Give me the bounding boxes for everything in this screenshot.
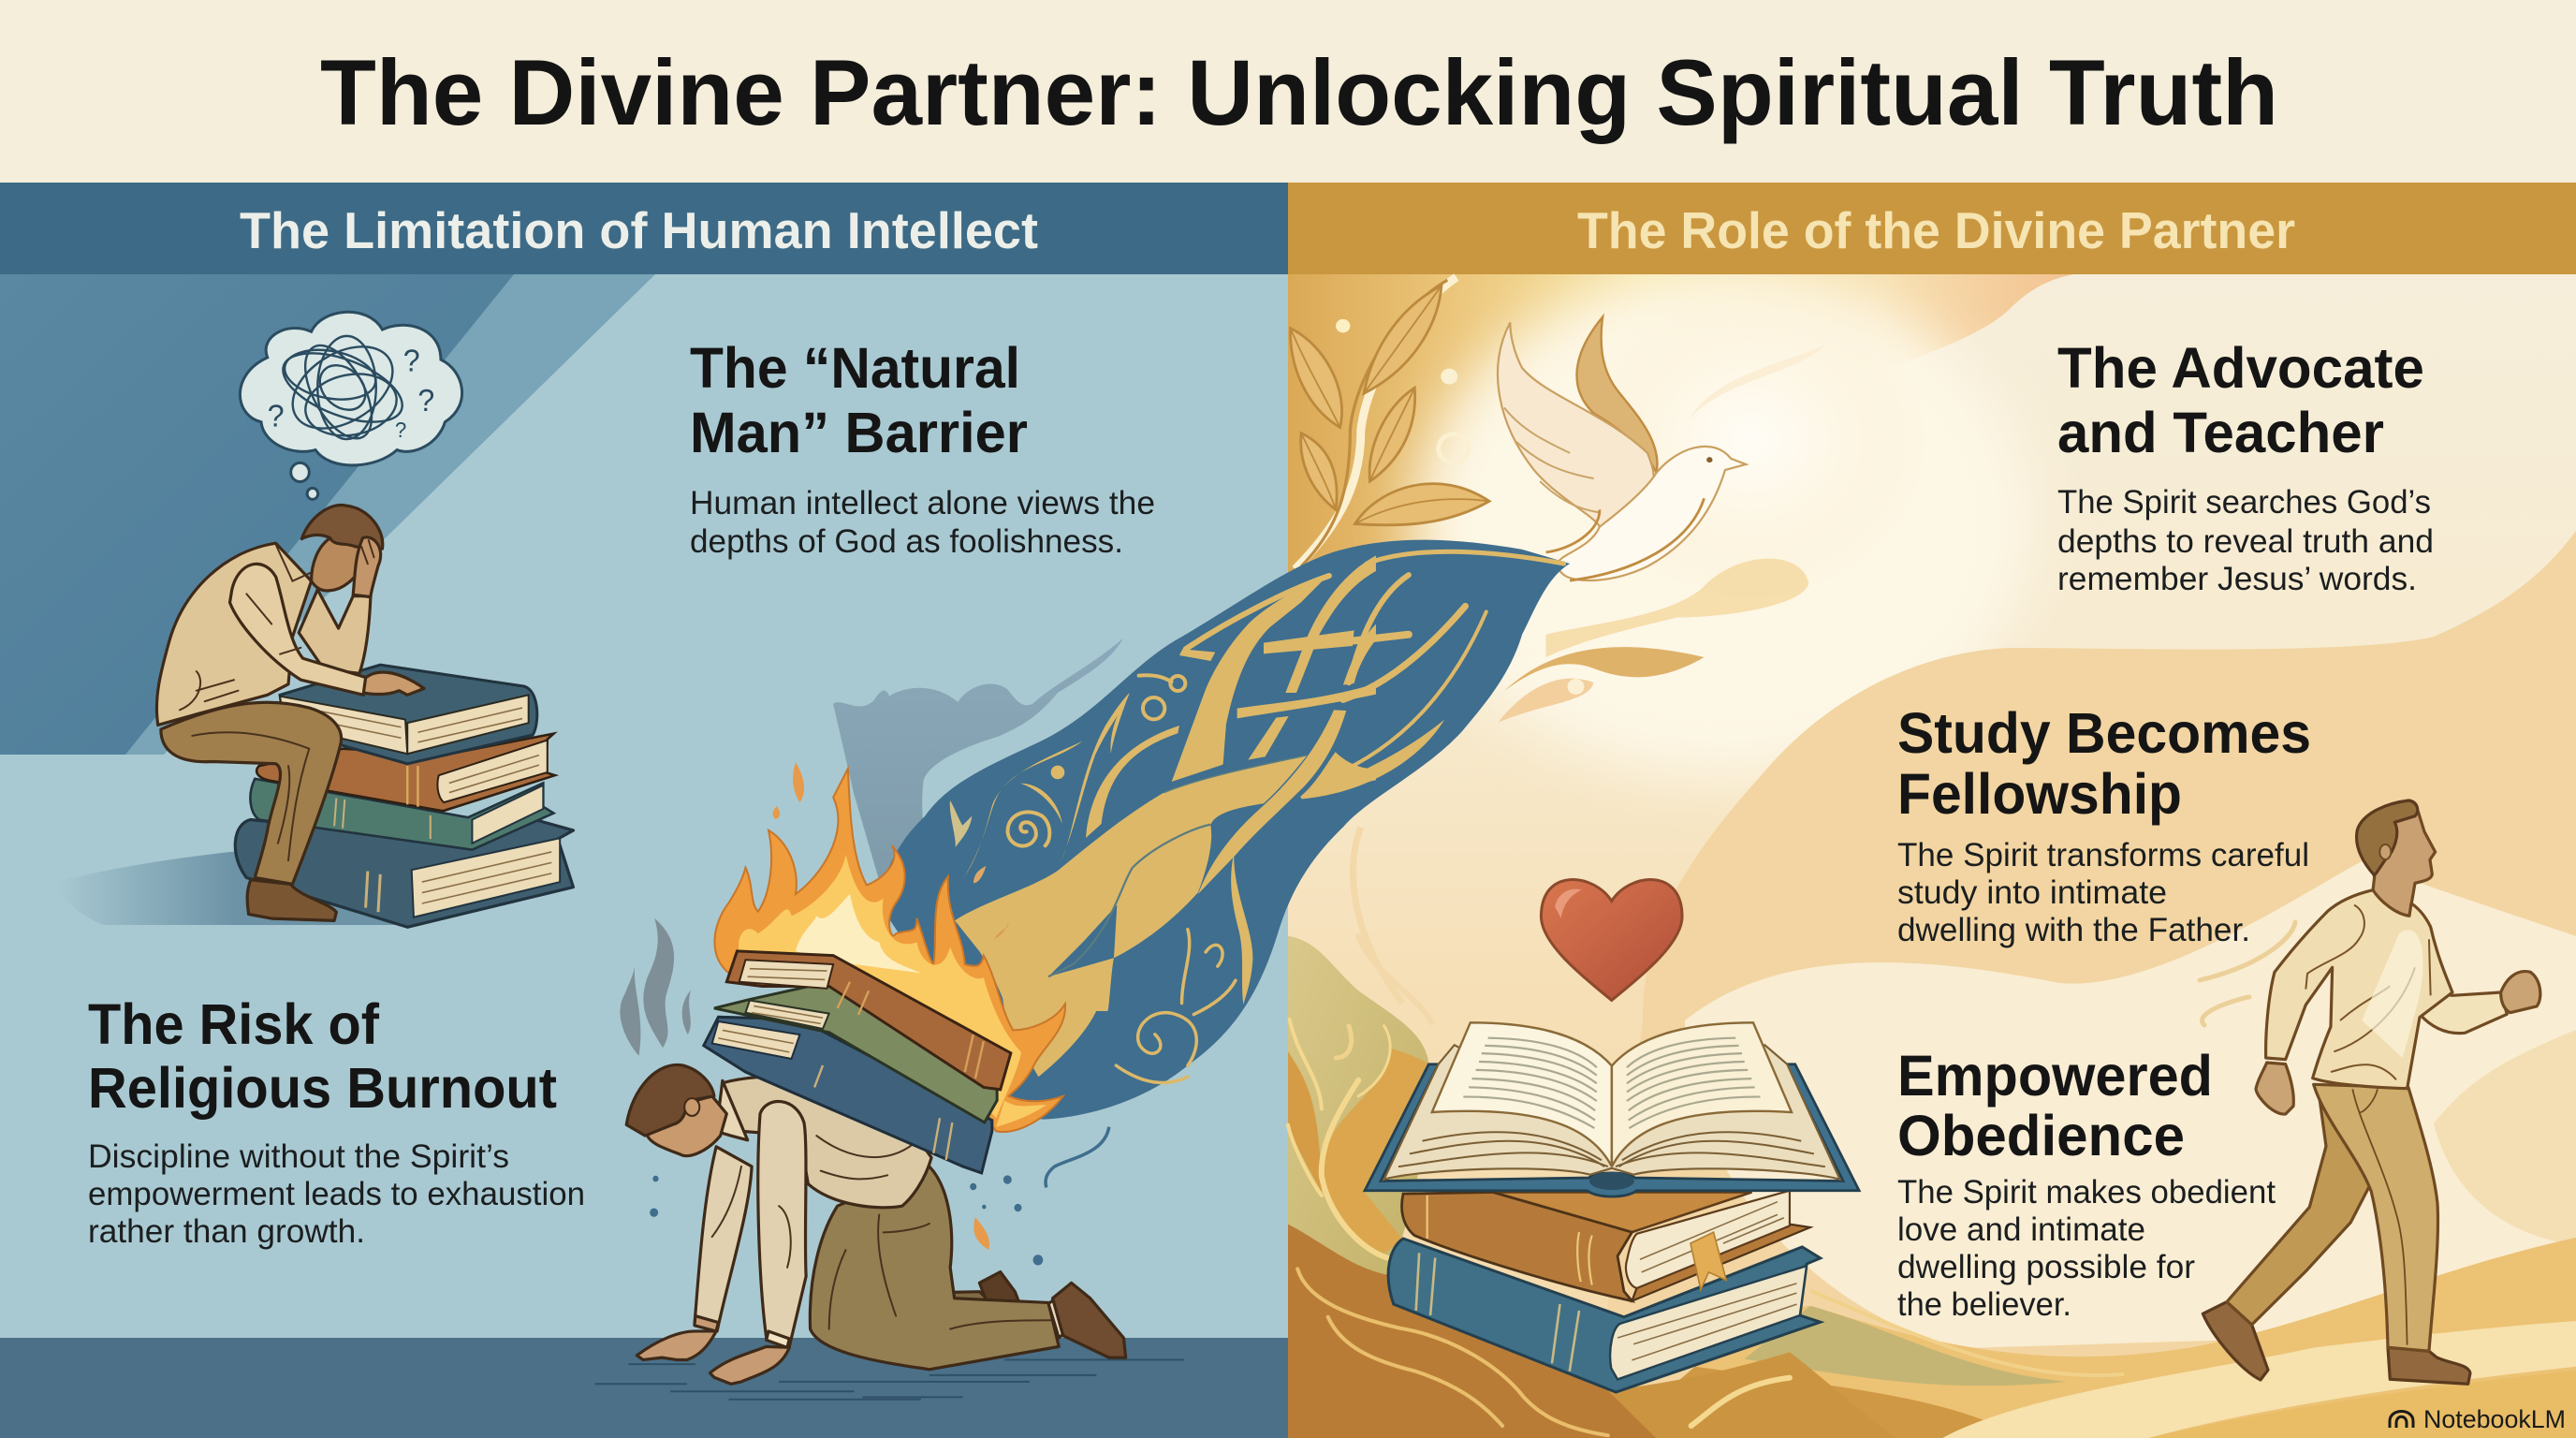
text block: empowered obedience: Empowered [1897, 1044, 2213, 1108]
dove [1498, 316, 1746, 580]
text block: advocate and teacher: The Spirit searches God’s [2057, 484, 2431, 521]
illustration: walking man [2203, 800, 2540, 1384]
text block: risk of religious burnout: Religious Burnout [88, 1056, 557, 1120]
text block: natural man barrier: depths of God as foolishness. [690, 523, 1123, 560]
text block: empowered obedience: Obedience [1897, 1104, 2185, 1167]
illustration: vine, leaves and dove [1291, 277, 1825, 1003]
smoke cloud behind flames [833, 638, 1123, 915]
blue lower book [1388, 1239, 1821, 1392]
illustration: open book on stacked books [1365, 1022, 1859, 1392]
shoe [247, 880, 336, 920]
illustration: confused man sitting on books [54, 312, 573, 927]
vine and leaves [1291, 277, 1489, 569]
open book [1365, 1022, 1859, 1196]
tan band below advocate text [1591, 531, 2576, 1438]
torso [723, 1077, 931, 1208]
text block: advocate and teacher: The Advocate [2057, 336, 2424, 400]
torso [156, 543, 312, 725]
rising smoke wisps [620, 918, 691, 1056]
panel: the limitation of human intellect [0, 183, 1288, 1438]
header: role of the divine partner [1288, 183, 2576, 274]
text block: risk of religious burnout: Discipline without the Spirit’s [88, 1138, 509, 1175]
front leg [2314, 1084, 2437, 1351]
front arm [230, 564, 367, 695]
drips [650, 1175, 1043, 1266]
text block: natural man barrier: Man” Barrier [690, 401, 1028, 464]
header: role of the divine partner: The Role of the Divine Partner [1577, 201, 2295, 259]
icon: thought bubble: ? [403, 343, 420, 378]
text block: study becomes fellowship [1897, 701, 2311, 948]
flowing ribbon from fire to dove [877, 540, 1570, 1120]
bottom waves left [1288, 936, 1895, 1438]
head [312, 538, 362, 591]
text block: advocate and teacher: remember Jesus’ words. [2057, 561, 2417, 597]
notebooklm logo: NotebookLM [2423, 1405, 2566, 1433]
text block: empowered obedience: love and intimate [1897, 1211, 2145, 1248]
text block: study becomes fellowship: dwelling with the Father. [1897, 912, 2250, 948]
lower gold strand [1000, 961, 1106, 1077]
text block: advocate and teacher: depths to reveal truth and [2057, 523, 2434, 560]
text block: advocate and teacher [2057, 336, 2434, 597]
brown middle book [1402, 1191, 1810, 1301]
sock and front shoe [1048, 1294, 1069, 1338]
floor marks [595, 1359, 1184, 1400]
near arm [758, 1102, 806, 1346]
text block: study becomes fellowship: study into intimate [1897, 874, 2167, 911]
text block: advocate and teacher: and Teacher [2057, 401, 2384, 464]
hand on book [363, 672, 424, 695]
book stack on back [704, 951, 1011, 1173]
right strands [1331, 551, 1564, 776]
rear leg [2227, 1089, 2375, 1325]
rear leg and shoe [879, 1292, 996, 1316]
bottom waves right [1613, 1238, 2576, 1438]
heart [1541, 880, 1682, 1000]
text block: risk of religious burnout: The Risk of [88, 992, 380, 1056]
bottom teal book [235, 819, 573, 927]
front shoe [2388, 1347, 2470, 1384]
icon: thought bubble: ? [268, 398, 285, 433]
title band [0, 0, 2576, 183]
panel: the role of the divine partner [1288, 183, 2576, 1438]
illustration: burned out man crawling under burning books [595, 762, 1184, 1400]
brown book [256, 734, 555, 811]
icon: bookmark ribbon [1690, 1232, 1726, 1290]
text block: natural man barrier: The “Natural [690, 336, 1020, 400]
braided gold strands [950, 555, 1376, 1011]
torso [2266, 890, 2452, 1089]
text block: empowered obedience: dwelling possible for [1897, 1249, 2195, 1285]
text block: study becomes fellowship: Fellowship [1897, 762, 2182, 826]
panel header: limitation: The Limitation of Human Intellect [240, 201, 1038, 259]
text block: natural man barrier [690, 336, 1155, 560]
text block: risk of religious burnout [88, 992, 585, 1250]
text block: study becomes fellowship: The Spirit transforms careful [1897, 837, 2309, 873]
text block: risk of religious burnout: empowerment leads to exhaustion [88, 1176, 585, 1212]
fist [2501, 972, 2540, 1013]
icon: thought bubble [240, 312, 462, 499]
panel header: limitation [0, 183, 1288, 274]
lower spirals [1116, 930, 1236, 1083]
rear arm [299, 590, 371, 673]
faint swirl over tan band [2200, 922, 2295, 1025]
rear hand [2256, 1063, 2293, 1114]
icon: thought bubble: ? [395, 418, 406, 442]
rear shoe [2203, 1302, 2268, 1380]
ribbon tail [1046, 1127, 1109, 1187]
text block: empowered obedience: the believer. [1897, 1286, 2071, 1323]
far arm [695, 1147, 752, 1331]
text block: empowered obedience [1897, 1044, 2276, 1323]
far forearm [2420, 992, 2507, 1034]
title: The Divine Partner: Unlocking Spiritual Truth [320, 40, 2278, 144]
text block: empowered obedience: The Spirit makes obedient [1897, 1174, 2276, 1211]
text block: natural man barrier: Human intellect alone views the [690, 485, 1155, 521]
flames [714, 762, 1065, 1250]
trousers [810, 1167, 1059, 1370]
text block: study becomes fellowship: Study Becomes [1897, 701, 2311, 765]
green book [250, 779, 553, 850]
icon: thought bubble: ? [417, 383, 434, 418]
bright area behind walking man [1685, 861, 2576, 1348]
head [648, 1096, 726, 1156]
ribbon body [877, 540, 1570, 1120]
soft wisps [1690, 345, 1825, 419]
trousers [161, 702, 342, 884]
neck and head [2365, 812, 2436, 916]
top book [280, 665, 537, 764]
text block: risk of religious burnout: rather than growth. [88, 1213, 365, 1250]
